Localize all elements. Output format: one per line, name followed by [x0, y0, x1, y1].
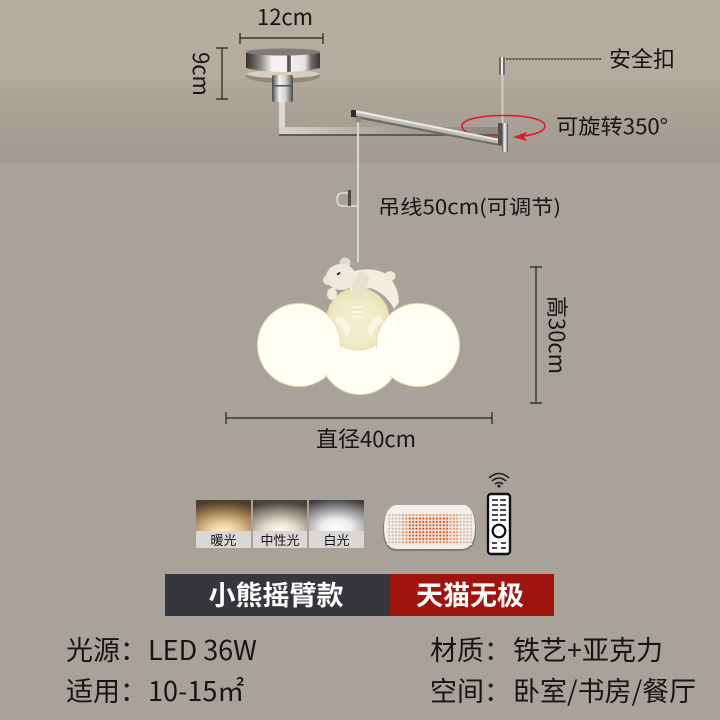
- dimension: canopy height: [186, 48, 228, 99]
- red rotation arrow: [513, 132, 527, 141]
- spec: applicable area: 适用: [66, 670, 120, 709]
- swing arm: [351, 110, 508, 152]
- bear figure: [323, 258, 399, 309]
- dimension: lamp diameter: 直径40cm: [316, 422, 416, 454]
- ceiling: [0, 0, 720, 163]
- spec: material: ：: [484, 629, 511, 668]
- icon: remote control: [488, 494, 510, 554]
- dimension: lamp height: 高30cm: [542, 296, 574, 374]
- safety buckle and wire: [499, 57, 602, 125]
- label: rotation: 可旋转350°: [556, 111, 668, 141]
- banner: model name: 小熊摇臂款: [208, 574, 344, 613]
- label: wire length: 吊线50cm(可调节): [378, 191, 561, 220]
- fixed arm: [279, 102, 499, 136]
- colour temperature: neutral: [253, 500, 307, 549]
- colour temperature: neutral: 中性光: [260, 530, 300, 549]
- spec: applicable area: ：: [120, 670, 147, 709]
- ceiling canopy: [246, 48, 320, 102]
- colour temperature: white: [309, 500, 364, 549]
- wire adjuster clip: [337, 190, 357, 206]
- globe outlines: [320, 315, 400, 395]
- dimension: lamp height: [530, 267, 574, 403]
- spec: material: 材质: [430, 629, 484, 668]
- label: safety buckle: 安全扣: [609, 42, 675, 74]
- spec: room: ：: [484, 670, 511, 709]
- colour temperature: warm: [196, 500, 251, 549]
- spec: applicable area: 10-15㎡: [148, 670, 244, 709]
- banner: control type: [390, 574, 554, 616]
- spec: room: 卧室/书房/餐厅: [513, 670, 696, 709]
- banner: model name: [165, 574, 390, 616]
- spec: material: 铁艺+亚克力: [513, 629, 663, 668]
- spec: room: 空间: [430, 670, 484, 709]
- banner: control type: 天猫无极: [416, 574, 524, 613]
- icon: wifi signal: [489, 474, 509, 487]
- colour temperature: warm: 暖光: [210, 530, 237, 549]
- dimension: lamp diameter: [226, 412, 492, 454]
- icon: smart speaker: [383, 505, 476, 551]
- dimension: canopy width: [240, 0, 323, 44]
- dimension: canopy width: 12cm: [257, 0, 313, 32]
- spec: light source: ：: [120, 629, 147, 668]
- red rotation ellipse back: [462, 116, 545, 137]
- spec: light source: LED 36W: [148, 629, 257, 668]
- globe join fill: [322, 348, 396, 376]
- colour temperature: white: 白光: [323, 530, 350, 549]
- spec: light source: 光源: [66, 629, 120, 668]
- pendant lamp: [257, 258, 460, 395]
- dimension: canopy height: 9cm: [186, 52, 218, 96]
- glass centre sphere: [327, 288, 389, 350]
- hanging wire: [357, 122, 359, 262]
